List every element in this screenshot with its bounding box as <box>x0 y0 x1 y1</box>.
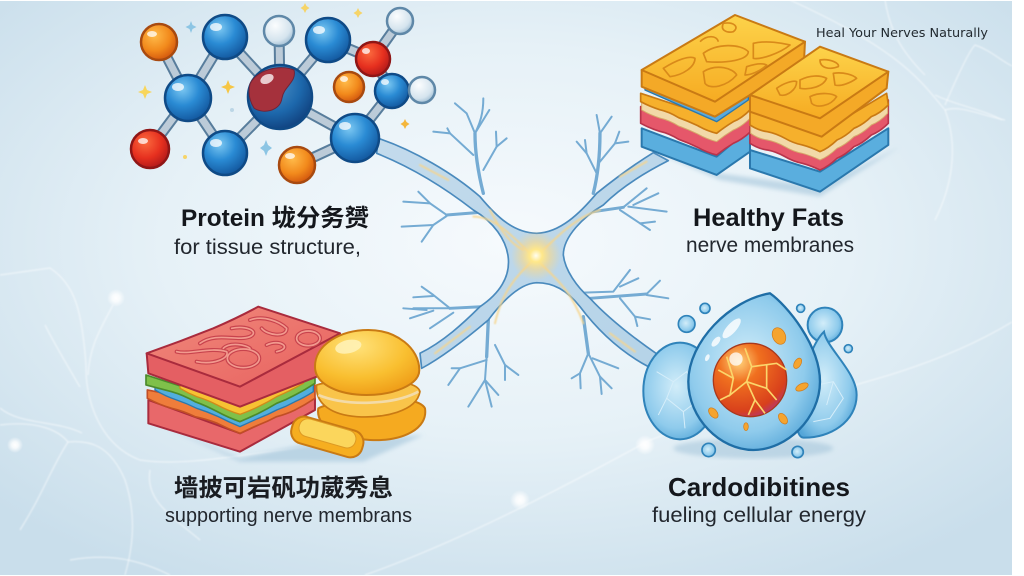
blue layer <box>155 382 313 427</box>
meat top face <box>147 307 340 387</box>
molecule illustration <box>131 3 435 183</box>
right droplet <box>797 332 857 438</box>
title: CJK heading: 墙披可岩矾功葳秀息 <box>174 475 393 502</box>
burger dome <box>315 330 419 395</box>
meat lower slab <box>148 398 315 452</box>
atom highlights <box>138 23 389 159</box>
droplet shine <box>704 316 744 362</box>
meat fold highlights <box>177 318 320 368</box>
meat folds <box>177 318 320 368</box>
bonds <box>150 21 422 165</box>
shadow <box>673 438 833 458</box>
title: Protein: Protein 垅分务赟 <box>181 205 369 232</box>
orange layer <box>147 385 315 433</box>
left sphere veins <box>657 372 697 428</box>
subtitle: supporting nerve membrans: supporting nerve membrans <box>165 505 412 527</box>
glow dots <box>7 289 655 510</box>
neuron diagram <box>377 98 668 407</box>
left sphere <box>643 343 717 439</box>
main droplet <box>688 293 820 450</box>
inner highlights <box>420 162 647 353</box>
shadow <box>147 418 423 462</box>
mitochondria <box>707 325 809 431</box>
header label: Heal Your Nerves Naturally <box>816 26 988 40</box>
right droplet veins <box>813 382 843 422</box>
subtitle: fueling cellular energy: fueling cellular energy <box>652 504 867 527</box>
sparkles <box>138 3 410 159</box>
central atom red patch <box>249 68 294 111</box>
tablet <box>288 414 366 460</box>
title: Cardodibitines: Cardodibitines <box>668 472 850 502</box>
title: Healthy Fats: Healthy Fats <box>693 204 844 232</box>
meat upper slab side <box>147 333 340 407</box>
fat block left <box>641 15 805 175</box>
bright synapse core <box>511 231 561 281</box>
healthy fats illustration <box>641 15 900 197</box>
subtitle: tissue structure: for tissue structure, <box>174 236 361 259</box>
axon body <box>377 138 668 368</box>
atoms <box>131 8 435 183</box>
burger bottom <box>318 398 425 440</box>
subtitle: nerve membranes: nerve membranes <box>686 234 854 257</box>
shadow <box>643 147 900 197</box>
nucleus veins <box>718 348 787 415</box>
top right bubble <box>808 308 842 342</box>
water droplet cell illustration <box>643 293 857 458</box>
small bubbles <box>678 303 852 458</box>
meat and burger illustration <box>146 307 425 462</box>
nucleus <box>713 343 787 417</box>
dendrites <box>402 98 668 407</box>
green layer <box>146 375 315 422</box>
yellow layer <box>180 378 303 414</box>
fat block right <box>750 47 888 192</box>
burger middle <box>317 380 420 417</box>
